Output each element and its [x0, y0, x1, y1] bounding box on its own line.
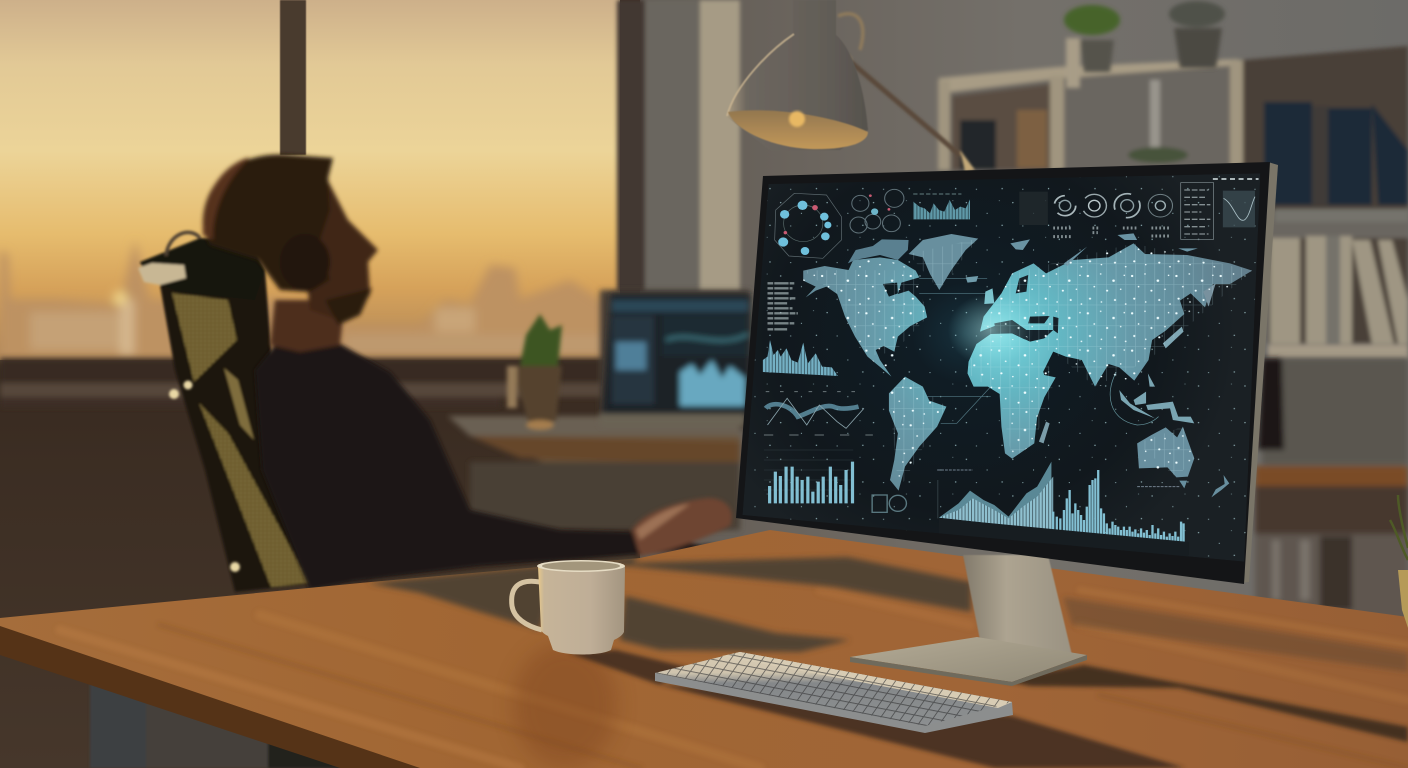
- potted plant on back desk: [507, 314, 562, 430]
- chair glints: [138, 263, 186, 285]
- network diagram: [850, 189, 904, 233]
- brass vase: [1398, 570, 1408, 628]
- bulb: [789, 111, 805, 127]
- main wooden desk: [0, 530, 1408, 768]
- headrest loop: [166, 232, 200, 256]
- city lights on americas: [803, 260, 939, 477]
- white books: [1268, 238, 1408, 343]
- svalbard: [1010, 239, 1030, 250]
- hair: [203, 154, 333, 292]
- chair upper mesh: [172, 293, 237, 382]
- blurred city skyline: [0, 240, 620, 360]
- screen: [742, 173, 1260, 580]
- chair: [138, 232, 350, 592]
- chart floor mask: [939, 518, 1189, 580]
- eurasia: [980, 243, 1252, 387]
- torso and arm: [255, 338, 745, 590]
- australia: [1137, 427, 1194, 477]
- window mullion: [280, 0, 306, 155]
- tasmania: [1179, 481, 1187, 488]
- lamp rim highlight: [727, 34, 794, 116]
- hand: [632, 498, 732, 556]
- items on shelf: [960, 120, 996, 170]
- bottom left bar chart: [764, 450, 853, 503]
- monitor rear edge: [1240, 162, 1278, 583]
- mug rim: [537, 560, 625, 572]
- right background office: [1255, 358, 1408, 624]
- keyboard lit strip: [722, 652, 1012, 708]
- desk top: [0, 530, 1408, 768]
- keyboard keys: [655, 652, 1012, 726]
- back wall left: [0, 380, 760, 768]
- legend list: [767, 283, 798, 329]
- wood grain: [60, 590, 1408, 768]
- chair highlight strip: [224, 368, 254, 440]
- headrest: [140, 238, 265, 300]
- sakhalin and kamchatka: [1203, 283, 1216, 307]
- japan: [1163, 327, 1184, 348]
- shelf top board: [938, 59, 1238, 92]
- monitor bezel: [736, 162, 1270, 584]
- iceland: [966, 276, 978, 283]
- mug body: [538, 566, 625, 654]
- southeast asia islands: [1119, 373, 1194, 423]
- spiky bars: [1053, 470, 1184, 543]
- keyboard: [655, 652, 1013, 733]
- status panel: [1019, 179, 1259, 239]
- blue binders: [1264, 102, 1408, 205]
- city lights on old world: [972, 248, 1234, 469]
- chair back frame: [145, 238, 350, 592]
- headphones: [280, 234, 330, 290]
- neck: [270, 300, 345, 352]
- africa: [967, 333, 1056, 459]
- cast shadows on desk: [368, 556, 1408, 672]
- desk lamp: [727, 0, 975, 172]
- map grid on land: [803, 239, 1252, 491]
- mug: [512, 560, 625, 654]
- desk legs under main table: [90, 675, 390, 768]
- stand base edge: [850, 655, 1087, 686]
- shelf boards: [1275, 209, 1408, 222]
- stand base: [850, 637, 1087, 682]
- foreground plant: [1390, 495, 1408, 628]
- keyboard shell: [655, 652, 1013, 733]
- atlantic connection lines: [919, 278, 991, 423]
- shelf interior: [938, 46, 1408, 360]
- person: [203, 154, 745, 590]
- british isles: [984, 288, 994, 304]
- siberian islands: [1117, 233, 1198, 252]
- potted plants on shelf: [1064, 1, 1225, 88]
- black sea and caspian: [1028, 316, 1059, 333]
- hub diagram: [775, 193, 841, 258]
- beard: [325, 288, 372, 325]
- bottom donut: [872, 495, 906, 512]
- face: [300, 165, 378, 322]
- lamp shade: [727, 0, 868, 150]
- south america: [889, 377, 946, 491]
- lamp arm: [838, 14, 975, 172]
- north america: [803, 257, 927, 377]
- mediterranean: [994, 320, 1053, 342]
- laptop on back desk: [600, 294, 750, 426]
- hudson bay: [883, 283, 898, 297]
- monitor: [736, 162, 1278, 584]
- world map: [803, 233, 1252, 497]
- shelf uprights: [938, 60, 1243, 210]
- chair lower mesh: [199, 403, 310, 587]
- window frame right: [617, 0, 740, 292]
- madagascar: [1039, 422, 1050, 443]
- novaya zemlya: [1064, 247, 1087, 266]
- greenland: [909, 234, 978, 290]
- left area chart: [763, 340, 838, 376]
- gauge labels: [1053, 228, 1169, 237]
- arctic islands: [848, 239, 909, 263]
- desk front edge: [0, 622, 430, 768]
- lamp inner glow: [728, 110, 868, 149]
- window sill: [0, 290, 750, 430]
- shelf compartments dark: [1243, 46, 1408, 210]
- line chart: [764, 392, 873, 435]
- bottom mountain chart: [937, 462, 1189, 580]
- window with sunset sky: [0, 0, 620, 360]
- pacific arc: [1110, 373, 1159, 425]
- ring gauges: [1054, 194, 1172, 218]
- shelving unit: [938, 46, 1408, 360]
- background desk: [448, 416, 740, 530]
- monitor and keyboard shadows: [569, 650, 1408, 768]
- baltic: [1016, 275, 1028, 293]
- top bar chart: [913, 194, 970, 219]
- mug handle: [512, 581, 542, 630]
- chair glint dots: [169, 361, 284, 572]
- back wall right: [640, 0, 1408, 620]
- reflection under mug: [513, 643, 617, 767]
- keyboard top surface: [655, 652, 1012, 726]
- monitor stand: [850, 555, 1087, 686]
- stand neck: [963, 555, 1072, 655]
- map centre glow: [952, 296, 1029, 358]
- new zealand: [1211, 475, 1229, 497]
